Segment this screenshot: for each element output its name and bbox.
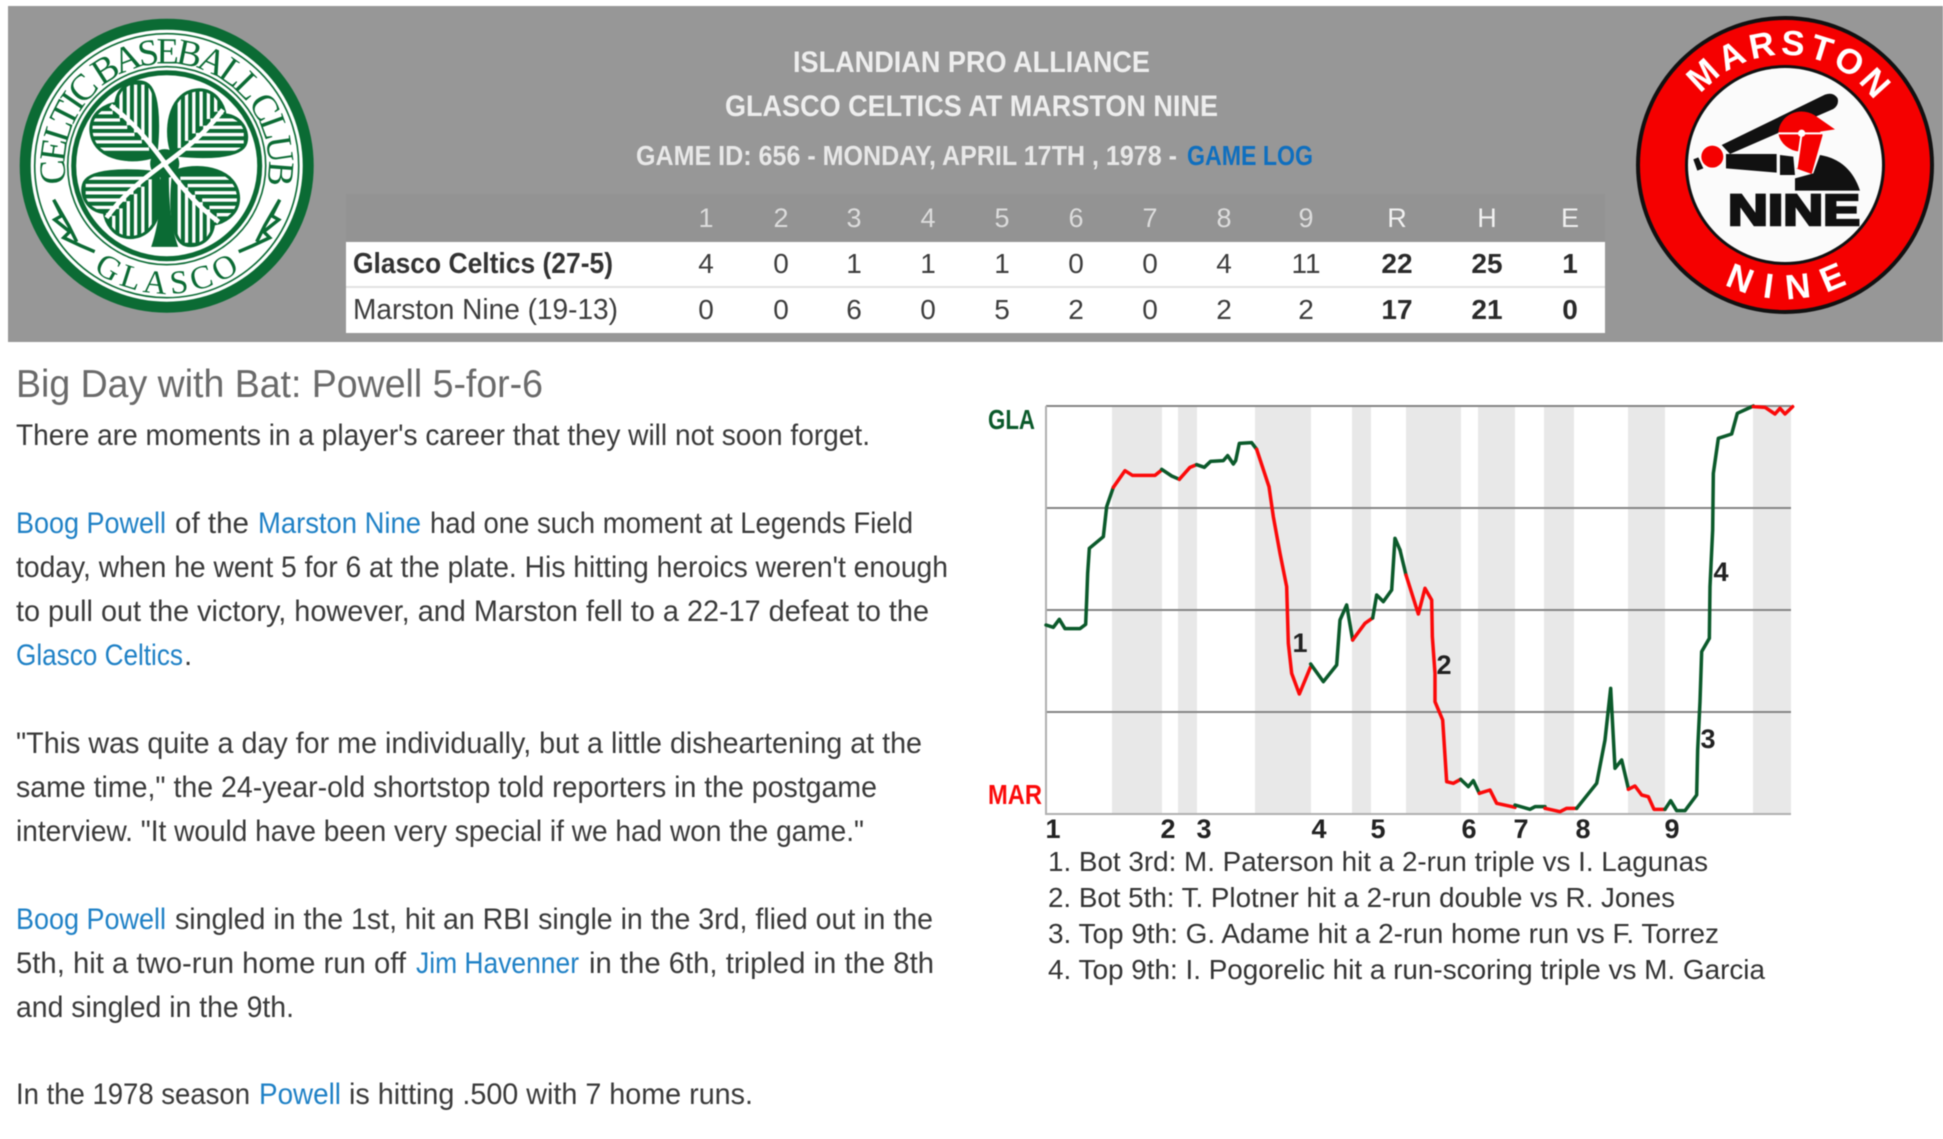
inning axis labels: 6	[1461, 814, 1477, 844]
article body text: had one such moment at Legends Field	[430, 507, 913, 540]
row: Marston Nine: 0	[1562, 294, 1578, 325]
game info line: GAME LOG	[1187, 140, 1313, 171]
row: Marston Nine: 2	[1068, 294, 1084, 325]
article body text: There are moments in a player's career that they will not soon forget.	[16, 419, 870, 452]
article heading: Big Day with Bat: Powell 5-for-6	[16, 363, 543, 406]
row: Glasco Celtics: 0	[1068, 248, 1084, 279]
table header row: 5	[994, 203, 1010, 233]
icon: Marston Nine logo: NINE	[1728, 186, 1860, 235]
table header row: 2	[773, 203, 789, 233]
row: Marston Nine: 21	[1471, 294, 1503, 325]
chart event markers: 2	[1436, 650, 1452, 680]
row: Glasco Celtics: 1	[994, 248, 1010, 279]
table header row: E	[1561, 203, 1579, 233]
line score table	[346, 194, 1605, 333]
inning axis labels: 3	[1196, 814, 1212, 844]
article body text: "This was quite a day for me individually, but a little disheartening at the	[16, 727, 922, 760]
table header row: 7	[1142, 203, 1158, 233]
row: Glasco Celtics: 0	[1142, 248, 1158, 279]
inning axis labels: 9	[1664, 814, 1680, 844]
row: Glasco Celtics: 22	[1381, 248, 1413, 279]
header band	[7, 5, 1943, 343]
table header row: 4	[920, 203, 936, 233]
table header row: 6	[1068, 203, 1084, 233]
article body text: In the 1978 season	[16, 1078, 250, 1111]
row: Glasco Celtics: 1	[1562, 248, 1578, 279]
article body text: to pull out the victory, however, and Marston fell to a 22-17 defeat to the	[16, 595, 929, 628]
row: Glasco Celtics: 1	[920, 248, 936, 279]
article body text: Glasco Celtics	[16, 639, 183, 672]
article body text: Boog Powell	[16, 903, 166, 936]
table header row: H	[1477, 203, 1497, 233]
chart key events list: 3. Top 9th: G. Adame hit a 2-run home run vs F. Torrez	[1048, 918, 1719, 949]
inning shading bands	[1112, 406, 1791, 814]
inning axis labels: 8	[1575, 814, 1591, 844]
article body text: Powell	[259, 1078, 341, 1111]
row: Marston Nine: 17	[1381, 294, 1413, 325]
row: Glasco Celtics: 4	[698, 248, 714, 279]
chart event markers	[1292, 557, 1729, 754]
article body text	[16, 419, 948, 1111]
title: league: ISLANDIAN PRO ALLIANCE	[793, 46, 1150, 79]
row: Glasco Celtics: 11	[1291, 248, 1321, 279]
article body text: of the	[175, 507, 249, 540]
row: Marston Nine: 5	[994, 294, 1010, 325]
article body text: 5th, hit a two-run home run off	[16, 947, 407, 980]
article body text: Marston Nine	[258, 507, 421, 540]
team label: GLA: GLA	[988, 404, 1035, 435]
article body text: in the 6th, tripled in the 8th	[589, 947, 934, 980]
row: Marston Nine: 2	[1298, 294, 1314, 325]
row: Marston Nine	[353, 294, 1578, 326]
table header row: R	[1387, 203, 1407, 233]
row: Glasco Celtics: 0	[773, 248, 789, 279]
chart key events list: 2. Bot 5th: T. Plotner hit a 2-run double vs R. Jones	[1048, 882, 1675, 913]
row: Marston Nine: 6	[846, 294, 862, 325]
row: Glasco Celtics	[353, 248, 1578, 280]
icon: Glasco Celtics crest	[19, 18, 314, 314]
row: Glasco Celtics: Glasco Celtics (27-5)	[353, 248, 613, 280]
chart key events list	[1048, 846, 1765, 985]
inning axis labels: 4	[1311, 814, 1327, 844]
inning axis labels: 2	[1160, 814, 1176, 844]
chart event markers: 1	[1292, 628, 1308, 658]
row: Marston Nine: 2	[1216, 294, 1232, 325]
inning axis labels	[1045, 814, 1680, 844]
inning axis labels: 1	[1045, 814, 1061, 844]
win probability chart	[988, 404, 1793, 844]
article body text: Boog Powell	[16, 507, 166, 540]
chart key events list: 1. Bot 3rd: M. Paterson hit a 2-run triple vs I. Lagunas	[1048, 846, 1708, 877]
article body text: interview. "It would have been very special if we had won the game."	[16, 815, 864, 848]
icon: Marston Nine logo	[1635, 15, 1935, 315]
table header row	[698, 203, 1579, 233]
article body text: Jim Havenner	[416, 947, 579, 980]
table header row: 8	[1216, 203, 1232, 233]
row: Marston Nine: 0	[698, 294, 714, 325]
article body text: is hitting .500 with 7 home runs.	[349, 1078, 753, 1111]
icon: Glasco Celtics crest: GLASCO	[96, 255, 236, 295]
inning axis labels: 7	[1513, 814, 1529, 844]
chart event markers: 4	[1713, 557, 1729, 587]
article body text: today, when he went 5 for 6 at the plate. His hitting heroics weren't enough	[16, 551, 948, 584]
table header row: 1	[698, 203, 714, 233]
chart event markers: 3	[1700, 724, 1716, 754]
row: Marston Nine: Marston Nine (19-13)	[353, 294, 618, 326]
win probability line	[1046, 406, 1793, 812]
article body text: singled in the 1st, hit an RBI single in the 3rd, flied out in the	[175, 903, 933, 936]
chart key events list: 4. Top 9th: I. Pogorelic hit a run-scoring triple vs M. Garcia	[1048, 954, 1765, 985]
icon: Marston Nine logo: MARSTON	[1685, 30, 1892, 99]
article body text: and singled in the 9th.	[16, 991, 294, 1024]
row: Glasco Celtics: 1	[846, 248, 862, 279]
inning axis labels: 5	[1370, 814, 1386, 844]
article body text: .	[184, 639, 192, 672]
article body text: same time," the 24-year-old shortstop told reporters in the postgame	[16, 771, 877, 804]
icon: Marston Nine logo: NINE	[1726, 262, 1847, 300]
table header row: 9	[1298, 203, 1314, 233]
team label: MAR: MAR	[988, 779, 1042, 810]
row: Marston Nine: 0	[920, 294, 936, 325]
row: Marston Nine: 0	[1142, 294, 1158, 325]
game info line: GAME ID: 656 - MONDAY, APRIL 17TH , 1978 -	[636, 140, 1177, 171]
icon: Glasco Celtics crest: CELTIC BASEBALL CLUB	[40, 38, 294, 185]
row: Marston Nine: 0	[773, 294, 789, 325]
title: matchup: GLASCO CELTICS AT MARSTON NINE	[725, 90, 1218, 123]
row: Glasco Celtics: 25	[1471, 248, 1503, 279]
table header row: 3	[846, 203, 862, 233]
row: Glasco Celtics: 4	[1216, 248, 1232, 279]
